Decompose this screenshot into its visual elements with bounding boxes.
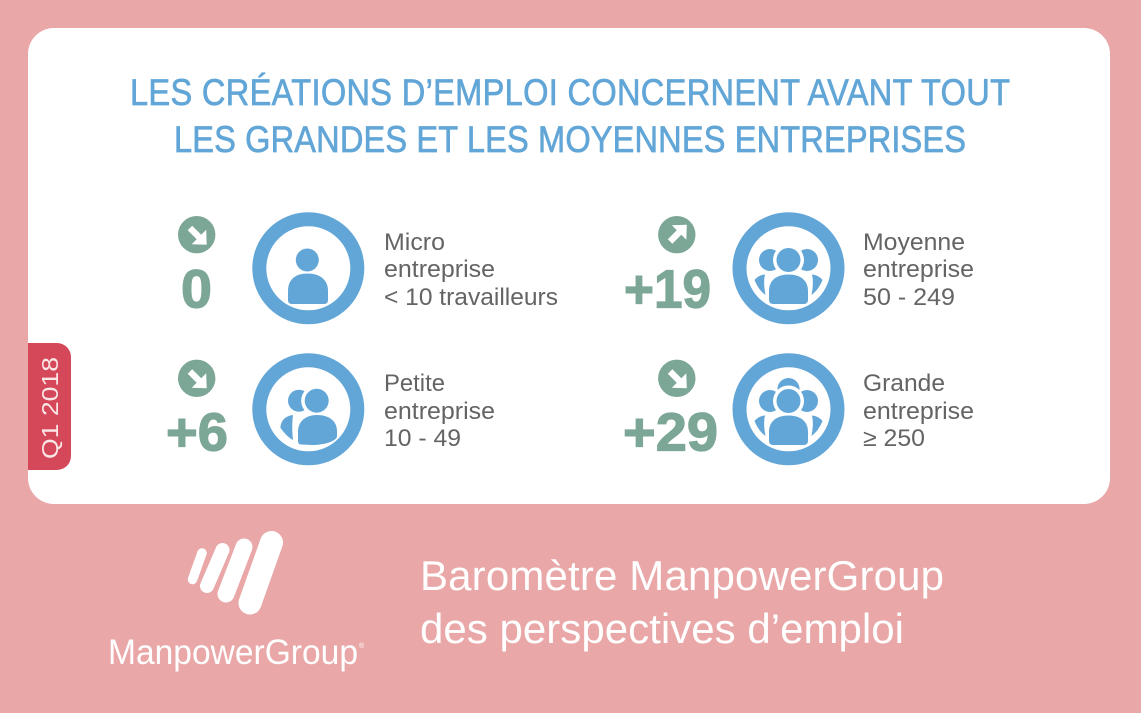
icon: group of six <box>740 360 838 458</box>
label <box>863 370 974 452</box>
label: ≥ 250 <box>863 425 925 452</box>
title <box>130 72 1010 160</box>
label <box>863 229 974 311</box>
logo wordmark: ManpowerGroup <box>108 633 358 672</box>
title: LES CRÉATIONS D’EMPLOI CONCERNENT AVANT TOUT <box>130 72 1010 113</box>
label: Grande <box>863 370 945 397</box>
icon: down arrow <box>658 360 696 397</box>
label: entreprise <box>863 256 974 283</box>
footer heading <box>420 552 944 652</box>
label: Moyenne <box>863 229 965 256</box>
panel: white card <box>28 28 1110 504</box>
item: moyenne entreprise <box>624 216 974 320</box>
icon: two people <box>259 360 357 458</box>
value: +6: +6 <box>166 402 228 462</box>
label <box>384 229 558 311</box>
title: LES GRANDES ET LES MOYENNES ENTREPRISES <box>174 119 966 160</box>
item: grande entreprise <box>623 360 974 462</box>
label: entreprise <box>863 398 974 425</box>
label: Petite <box>384 370 445 397</box>
icon: down arrow <box>178 216 215 253</box>
label: entreprise <box>384 256 495 283</box>
label: Micro <box>384 229 445 256</box>
icon: group of five <box>740 219 838 317</box>
icon: down arrow <box>178 360 215 397</box>
label: 50 - 249 <box>863 284 955 311</box>
logo: ManpowerGroup <box>108 542 365 672</box>
item: petite entreprise <box>166 360 495 462</box>
label: < 10 travailleurs <box>384 284 558 311</box>
footer heading: des perspectives d’emploi <box>420 605 904 652</box>
label: entreprise <box>384 398 495 425</box>
tab: Q1 2018 <box>28 343 71 470</box>
tab: Q1 2018: Q1 2018 <box>37 357 63 459</box>
icon: one person <box>259 219 357 317</box>
item: micro entreprise <box>178 216 558 320</box>
footer heading: Baromètre ManpowerGroup <box>420 552 944 599</box>
icon: logo bars <box>192 542 272 603</box>
value: +29: +29 <box>623 402 718 462</box>
value: +19: +19 <box>624 260 711 320</box>
logo: ManpowerGroup: ® <box>359 642 365 650</box>
label <box>384 370 495 452</box>
value: 0: 0 <box>181 260 212 320</box>
icon: up arrow <box>658 216 696 253</box>
label: 10 - 49 <box>384 425 461 452</box>
